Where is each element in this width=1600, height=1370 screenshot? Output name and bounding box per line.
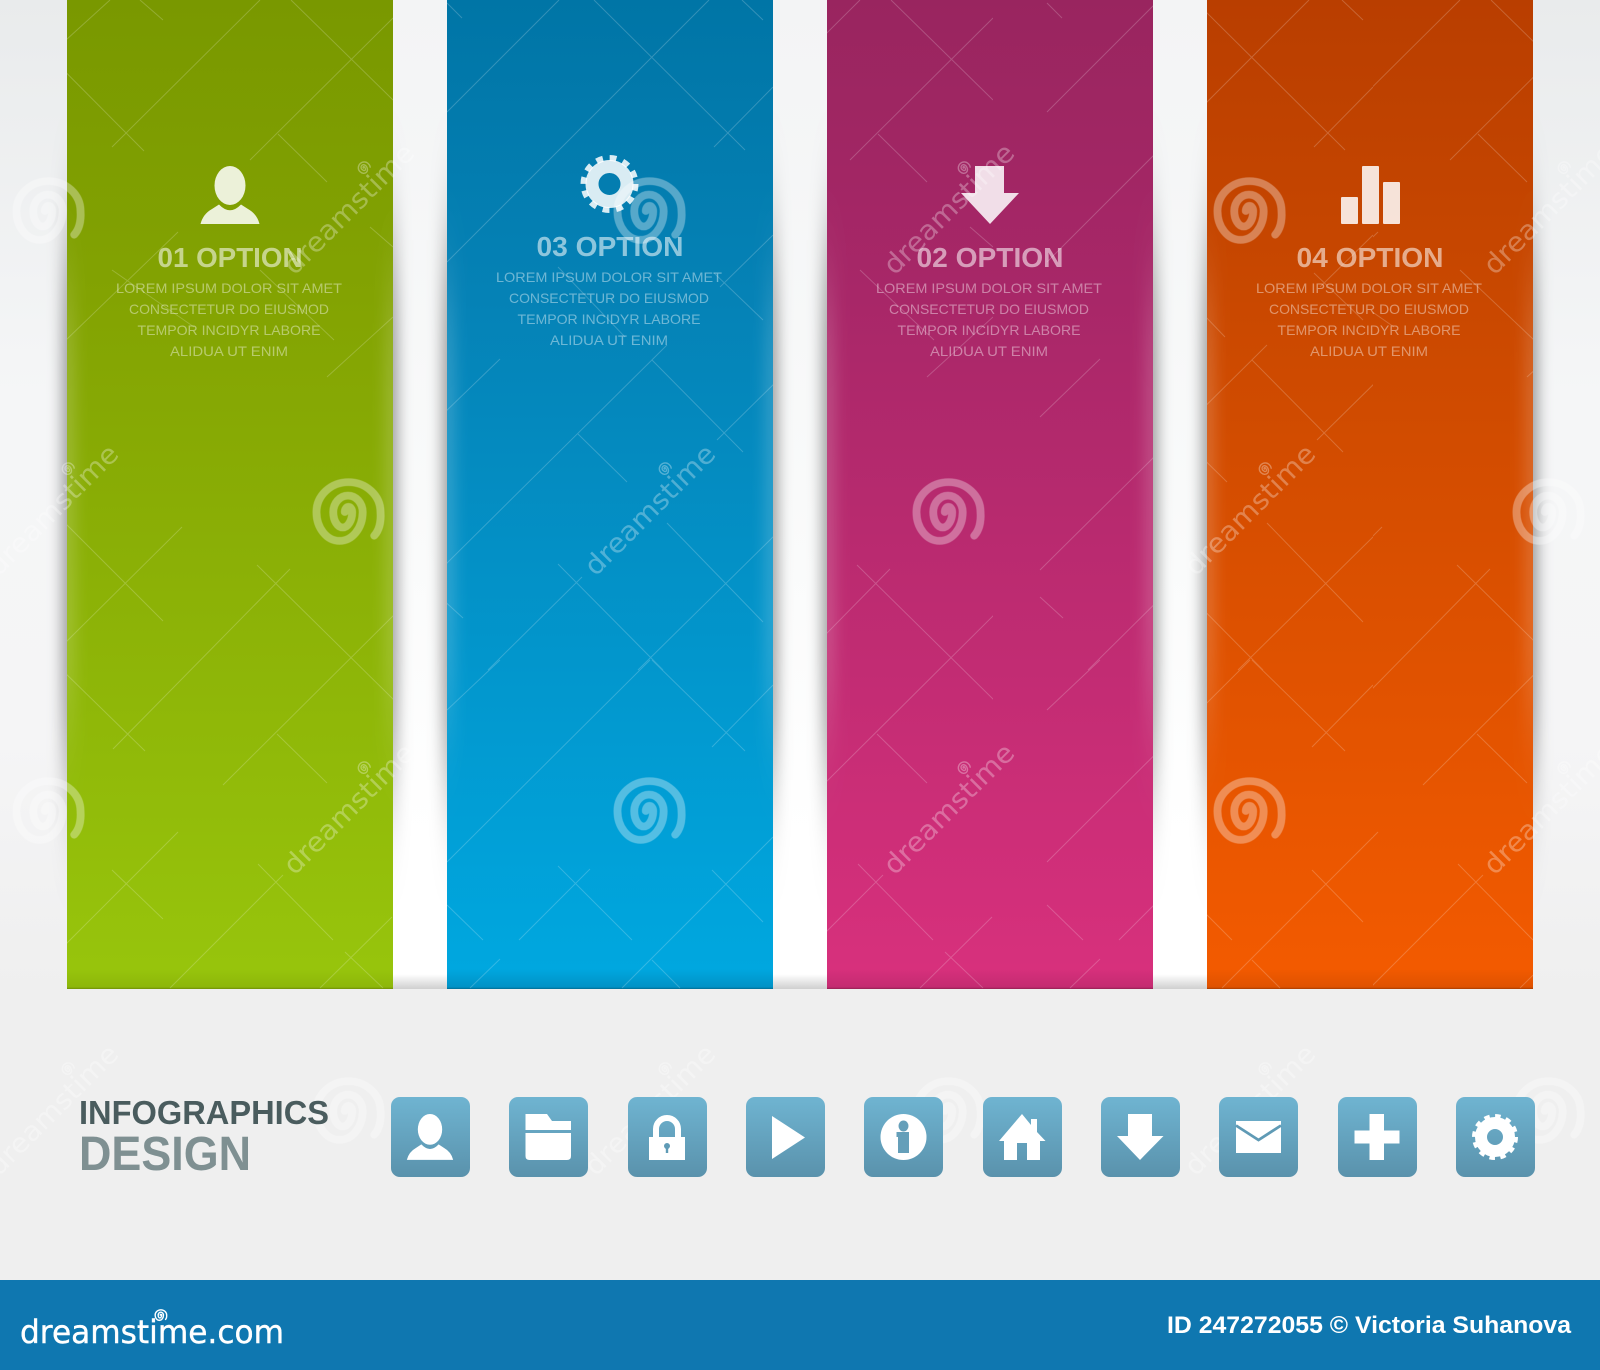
- option 04 content: [1256, 166, 1482, 359]
- icon: info tile: [864, 1097, 943, 1177]
- panel: 01 green: [67, 0, 393, 989]
- text block: option 04 body: TEMPOR INCIDYR LABORE: [1278, 322, 1460, 338]
- heading: 01 OPTION: 01 OPTION: [158, 242, 302, 273]
- footer bar: [0, 1280, 1600, 1370]
- icon: plus tile: [1338, 1097, 1417, 1177]
- watermark spirals: [16, 181, 1581, 1140]
- text block: option 02 body: LOREM IPSUM DOLOR SIT AMET: [876, 280, 1102, 296]
- icon: download tile: [1101, 1097, 1180, 1177]
- icon: bar chart: [1341, 166, 1400, 224]
- text block: option 03 body: TEMPOR INCIDYR LABORE: [518, 311, 700, 327]
- text block: option 03 body: [496, 269, 722, 348]
- text block: option 01 body: LOREM IPSUM DOLOR SIT AMET: [116, 280, 342, 296]
- text block: option 01 body: CONSECTETUR DO EIUSMOD: [129, 301, 329, 317]
- text block: option 02 body: TEMPOR INCIDYR LABORE: [898, 322, 1080, 338]
- text block: option 04 body: CONSECTETUR DO EIUSMOD: [1269, 301, 1469, 317]
- text block: option 04 body: ALIDUA UT ENIM: [1310, 343, 1428, 359]
- text block: option 01 body: ALIDUA UT ENIM: [170, 343, 288, 359]
- footer logo: dreamstime.com: dreamstime.com: [20, 1313, 284, 1351]
- panel drop shadows: [62, 240, 1538, 780]
- text block: option 03 body: ALIDUA UT ENIM: [550, 332, 668, 348]
- panel: 03 blue: [447, 0, 773, 989]
- text block: option 01 body: [116, 280, 342, 359]
- heading: 03 OPTION: 03 OPTION: [536, 231, 684, 262]
- text block: option 03 body: CONSECTETUR DO EIUSMOD: [509, 290, 709, 306]
- heading: 02 OPTION: 02 OPTION: [916, 242, 1064, 273]
- title: infographics design: INFOGRAPHICS: [79, 1094, 329, 1131]
- watermark dreamstime text: [0, 131, 1600, 1182]
- icon: user tile: [391, 1097, 470, 1177]
- option 02 content: [876, 166, 1102, 359]
- icon row: [391, 1097, 1535, 1177]
- title: infographics design: [79, 1094, 329, 1181]
- icon: lock tile: [628, 1097, 707, 1177]
- panel edge highlights: [59, 290, 1541, 720]
- heading: 04 OPTION: 04 OPTION: [1296, 242, 1444, 273]
- option 01 content: [116, 166, 342, 359]
- icon: down arrow: [961, 166, 1019, 224]
- watermark line pattern: [0, 0, 1600, 988]
- panel: 02 magenta: [827, 0, 1153, 989]
- icon: gear: [584, 158, 636, 210]
- gap strips between panels: [393, 0, 1207, 989]
- text block: option 04 body: [1256, 280, 1482, 359]
- icon: play tile: [746, 1097, 825, 1177]
- icon: person: [200, 166, 260, 224]
- title: infographics design: DESIGN: [79, 1128, 251, 1181]
- icon: home tile: [983, 1097, 1062, 1177]
- icon: settings tile: [1456, 1097, 1535, 1177]
- text block: option 03 body: LOREM IPSUM DOLOR SIT AMET: [496, 269, 722, 285]
- icon: mail tile: [1219, 1097, 1298, 1177]
- option 03 content: [496, 158, 722, 348]
- upper backdrop: [0, 0, 1600, 989]
- text block: option 02 body: [876, 280, 1102, 359]
- text block: option 02 body: CONSECTETUR DO EIUSMOD: [889, 301, 1089, 317]
- text block: option 04 body: LOREM IPSUM DOLOR SIT AMET: [1256, 280, 1482, 296]
- icon: folder tile: [509, 1097, 588, 1177]
- text block: option 02 body: ALIDUA UT ENIM: [930, 343, 1048, 359]
- text block: option 01 body: TEMPOR INCIDYR LABORE: [138, 322, 320, 338]
- footer credit: ID 247272055 © Victoria Suhanova: [1167, 1312, 1572, 1339]
- panel: 04 orange: [1207, 0, 1533, 989]
